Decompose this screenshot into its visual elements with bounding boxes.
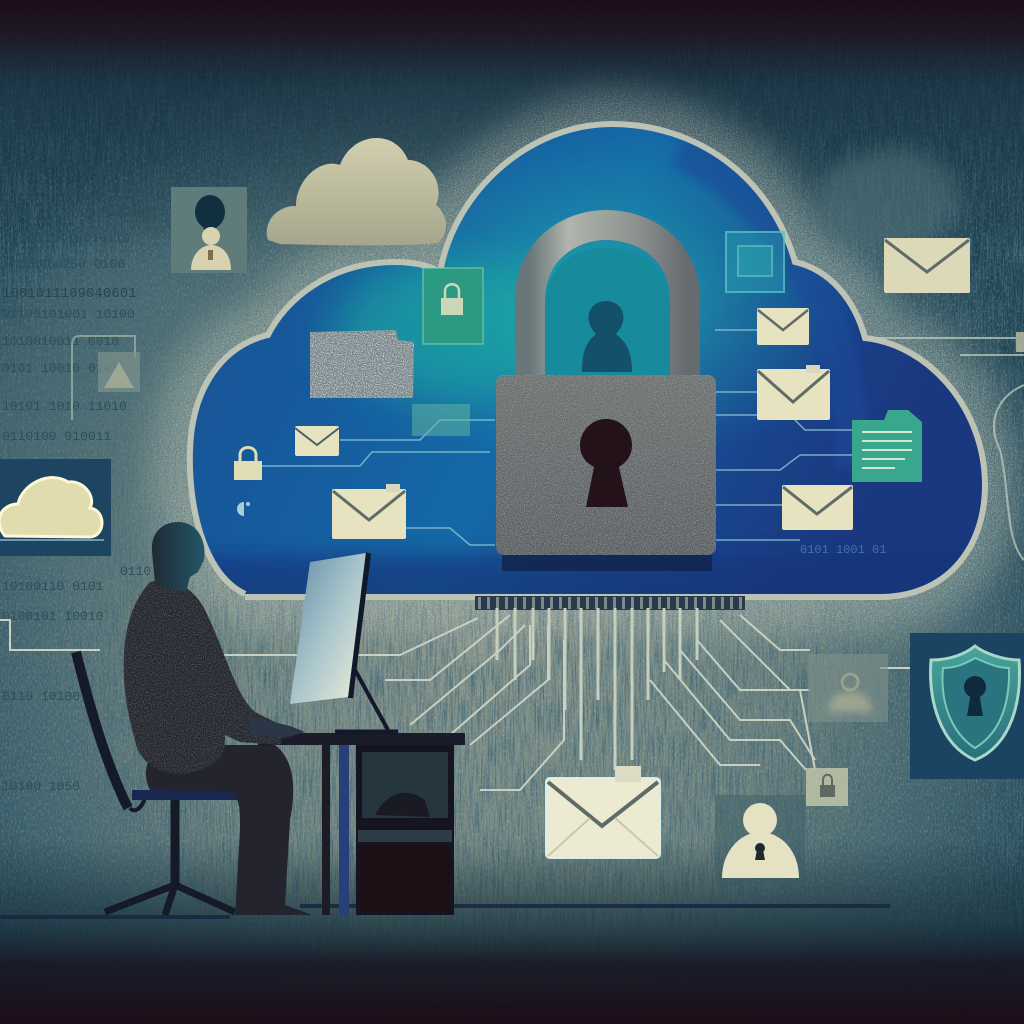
large envelope bottom (546, 766, 660, 858)
large cloud (170, 124, 1010, 615)
desk drawer unit (356, 745, 454, 915)
glow halo around cloud (128, 68, 1024, 655)
lock body (496, 375, 716, 555)
desk (258, 733, 465, 915)
shackle (530, 225, 685, 378)
right edge circuit fragment (870, 332, 1024, 560)
green document (852, 410, 922, 482)
binary code background text: 1001011109040601 (2, 286, 136, 302)
envelope: right lower (782, 485, 853, 530)
hand (248, 716, 305, 738)
green lock tile (423, 268, 483, 344)
circuit connector under cloud (0, 596, 940, 790)
legs (146, 745, 312, 915)
small lock tile left (72, 336, 140, 420)
binary code background text: 10100 1050 (2, 779, 80, 794)
binary code background text: 0110 1001 (120, 564, 190, 579)
circuit lines in cloud (260, 330, 855, 545)
small cloud top left (267, 138, 446, 245)
small padlock icon in cloud (234, 448, 262, 480)
person at desk (76, 522, 312, 915)
envelope: right middle (757, 365, 830, 420)
binary code background text: 0110 10100 (2, 689, 80, 704)
binary code background text: 0101 10010 0101 (2, 361, 119, 376)
shield tile (910, 633, 1024, 779)
user lock icon bottom (715, 795, 805, 885)
binary code background text: 0100111010010110 (5, 231, 130, 246)
envelope: left small (295, 426, 339, 456)
keyhole (580, 419, 632, 507)
floor line (0, 906, 890, 917)
faint cloud top right (820, 150, 960, 250)
envelope tile upper right (884, 238, 970, 293)
faint green tile (412, 404, 470, 436)
avatar tile upper left (171, 187, 247, 273)
binary code background text: 1000960250 0106 (8, 257, 125, 272)
small lock tile lower (806, 768, 848, 806)
envelope: right top (757, 308, 809, 345)
lock tile lower right (808, 654, 888, 722)
binary code background text: 1001 10100 0101011 (10, 206, 151, 221)
monitor (290, 552, 398, 732)
binary code background text: 01100101001 10100 (2, 307, 135, 322)
binary code background text (2, 182, 190, 794)
teal panel, upper right (726, 232, 784, 292)
faint cloud text: 0101 1001 01 (800, 543, 886, 557)
chair (76, 652, 240, 915)
binary code background text: 1010010011 0010 (2, 334, 119, 349)
head (152, 522, 205, 592)
binary code background text: 0110100 010011 (2, 429, 111, 444)
binary code background text: 0100101 10010 (2, 609, 103, 624)
binary code background text: 10100110 0101 (2, 579, 104, 594)
cloud tile left (0, 459, 111, 556)
padlock (496, 225, 716, 571)
binary code background text: 0100110 1010 0110 (20, 182, 153, 197)
torso (124, 580, 285, 774)
envelope: left large (332, 484, 406, 539)
shackle interior (545, 248, 670, 375)
speckled folder (310, 330, 414, 398)
pie mark (237, 502, 250, 516)
silhouette in shackle (582, 301, 632, 372)
binary code background text: 10101 1010 11010 (2, 399, 127, 414)
